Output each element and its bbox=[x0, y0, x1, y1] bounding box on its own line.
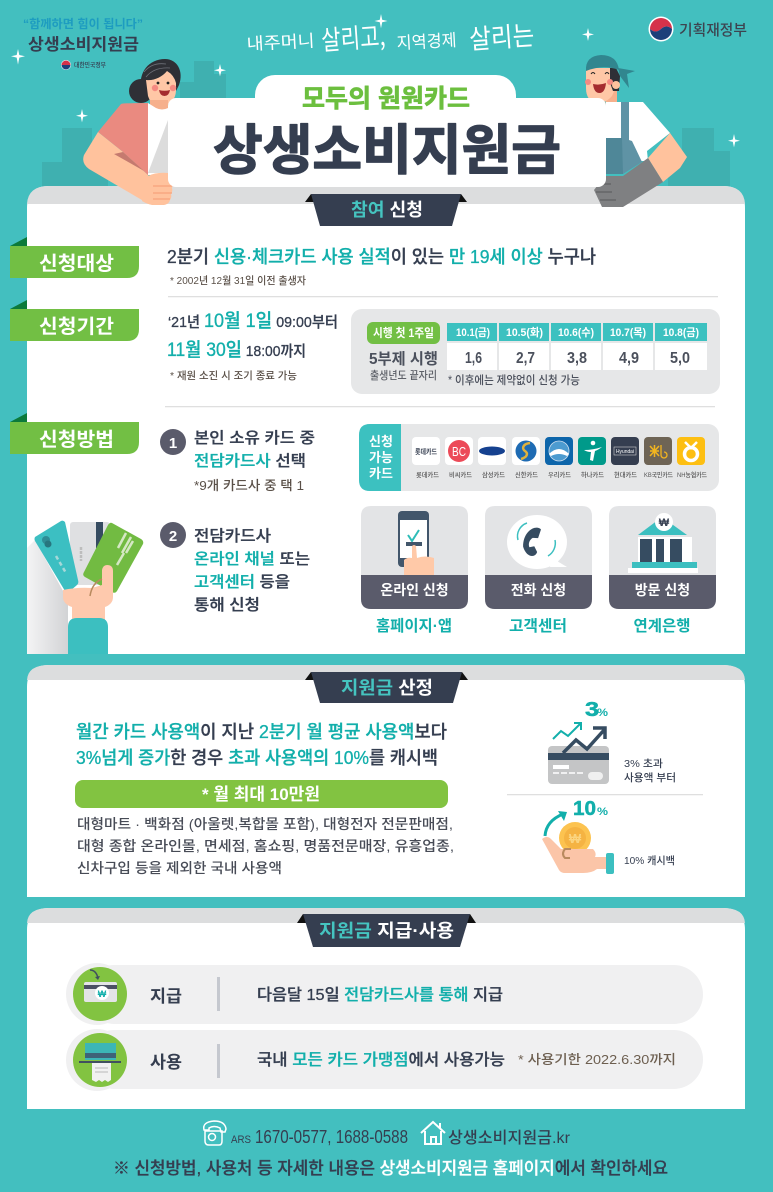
card: bank visit bbox=[609, 506, 716, 635]
step 2 bbox=[160, 522, 310, 614]
available card logos: 롯데카드 bbox=[415, 447, 437, 456]
title sign bbox=[168, 75, 606, 187]
available card logos: 현대카드 bbox=[614, 470, 637, 479]
section ribbon: payment and use bbox=[297, 914, 476, 947]
icon: card terminal receipt bbox=[79, 1043, 121, 1082]
icon: card with rising arrows bbox=[548, 699, 609, 784]
icon: card with rising arrows: % bbox=[597, 707, 608, 719]
card: phone application: 고객센터 bbox=[509, 617, 567, 635]
campaign logo top-left bbox=[23, 16, 143, 70]
label: method bbox=[10, 413, 139, 454]
available card logos: 롯데카드 bbox=[416, 470, 439, 479]
row: use: * 사용기한 2022.6.30까지 bbox=[518, 1052, 676, 1067]
footer contact: 1670-0577, 1688-0588 bbox=[255, 1127, 408, 1147]
campaign logo top-left: “함께하면 힘이 됩니다” bbox=[23, 16, 143, 31]
footer contact bbox=[204, 1121, 571, 1147]
sparkles bbox=[11, 14, 740, 147]
footer note: ※ 신청방법, 사용처 등 자세한 내용은 상생소비지원금 홈페이지에서 확인하세요 bbox=[113, 1159, 668, 1178]
icon: card with rising arrows: 3 bbox=[585, 699, 599, 721]
panel: participation background bbox=[27, 186, 745, 654]
illustration: hand holding cards bbox=[27, 521, 143, 654]
schedule table: 2,7 bbox=[516, 350, 535, 367]
row: use: 국내 모든 카드 가맹점 에서 사용가능 bbox=[257, 1051, 505, 1069]
available card logos: 하나카드 bbox=[581, 470, 604, 479]
text: exclusions: 대형마트 · 백화점 (아울렛,복합몰 포함), 대형전자 전문판매점, bbox=[77, 816, 453, 832]
schedule table: 10.8(금) bbox=[663, 326, 699, 339]
step 2: 통해 신청 bbox=[194, 596, 260, 614]
row: use: 사용 bbox=[150, 1053, 182, 1072]
text: over 3% bbox=[624, 758, 676, 784]
text: exclusions: 신차구입 등을 제외한 국내 사용액 bbox=[77, 860, 282, 876]
text: period description: 11월 30일 18:00까지 bbox=[167, 339, 306, 361]
schedule table: 10.7(목) bbox=[610, 326, 646, 339]
icon: telephone bbox=[204, 1121, 226, 1145]
icon: coin in hand: % bbox=[597, 806, 608, 818]
ministry logo top-right: 기획재정부 bbox=[679, 22, 747, 39]
handwritten slogan: 지역경제 bbox=[396, 26, 457, 54]
schedule table: 10.6(수) bbox=[558, 326, 594, 339]
section ribbon: payment and use: 지원금 지급·사용 bbox=[319, 921, 454, 941]
card: online application: 홈페이지·앱 bbox=[376, 617, 452, 635]
label: target bbox=[10, 237, 139, 278]
label: target: 신청대상 bbox=[39, 253, 114, 275]
available card logos: NH농협카드 bbox=[677, 470, 707, 479]
section ribbon: participation: 참여 신청 bbox=[351, 200, 423, 220]
icon: coin in hand: 10 bbox=[573, 798, 596, 820]
available card logos: 신청 bbox=[369, 434, 393, 449]
card: bank visit: 연계은행 bbox=[634, 617, 690, 635]
row: payment bbox=[66, 963, 703, 1025]
schedule table: 10.1(금) bbox=[456, 326, 490, 339]
text: calculation rule bbox=[76, 722, 447, 768]
text: target description: 2분기 신용·체크카드 사용 실적이 있는 만 19세 이상 누구나 bbox=[167, 247, 596, 267]
handwritten slogan: 살리는 bbox=[468, 14, 535, 57]
available card logos bbox=[359, 424, 719, 491]
section ribbon: calculation: 지원금 산정 bbox=[341, 678, 433, 698]
text: calculation rule: 월간 카드 사용액이 지난 2분기 월 평균 사용액보다 bbox=[76, 722, 447, 742]
icon: coin in hand: ₩ bbox=[569, 831, 582, 846]
available card logos: 비씨카드 bbox=[449, 470, 472, 479]
text: period description: ‘21년 10월 1일 09:00부터 bbox=[168, 310, 338, 332]
footer contact: ARS bbox=[231, 1134, 251, 1146]
schedule table: 시행 첫 1주일 bbox=[373, 325, 434, 340]
text: 10% cashback: 10% 캐시백 bbox=[624, 854, 675, 867]
handwritten slogan: 내주머니 bbox=[246, 26, 315, 55]
step 2: 고객센터 등을 bbox=[194, 573, 290, 591]
icon: house bbox=[421, 1122, 445, 1144]
card: online application bbox=[361, 506, 468, 635]
card: bank visit: ₩ bbox=[659, 517, 670, 529]
subtitle: 모두의 원원카드 bbox=[302, 85, 470, 113]
card: online application: 온라인 신청 bbox=[380, 582, 449, 598]
available card logos: 카드 bbox=[369, 466, 393, 481]
main title: 상생소비지원금 bbox=[213, 121, 561, 181]
handwritten slogan bbox=[246, 14, 535, 58]
step 1: 1 bbox=[169, 435, 177, 452]
text: over 3%: 3% 초과 bbox=[624, 758, 663, 770]
icon: coin in hand bbox=[542, 798, 614, 874]
available card logos: BC bbox=[452, 444, 466, 459]
text: target description: * 2002년 12월 31일 이전 출생자 bbox=[170, 274, 306, 287]
row: payment: 지급 bbox=[150, 987, 182, 1006]
schedule table: 5부제 시행 bbox=[369, 350, 438, 368]
text: target description bbox=[167, 247, 596, 287]
step 2: 전담카드사 bbox=[194, 527, 271, 545]
step 1: 전담카드사 선택 bbox=[194, 452, 306, 470]
section ribbon: participation bbox=[305, 194, 467, 226]
label: period bbox=[10, 300, 139, 341]
schedule table: 3,8 bbox=[567, 350, 587, 367]
available card logos: KB국민카드 bbox=[644, 470, 673, 479]
step 2: 온라인 채널 또는 bbox=[194, 550, 310, 568]
step 1: 본인 소유 카드 중 bbox=[194, 429, 315, 447]
schedule table: 출생년도 끝자리 bbox=[370, 369, 437, 382]
schedule table: * 이후에는 제약없이 신청 가능 bbox=[448, 374, 580, 387]
text: exclusions: 대형 종합 온라인몰, 면세점, 홈쇼핑, 명품전문매장, 유흥업종, bbox=[77, 838, 454, 854]
card: phone application: 전화 신청 bbox=[511, 582, 566, 598]
text: period description bbox=[167, 310, 338, 382]
text: exclusions bbox=[77, 816, 454, 876]
text: calculation rule: 3%넘게 증가한 경우 초과 사용액의 10%를 캐시백 bbox=[76, 748, 438, 768]
text: over 3%: 사용액 부터 bbox=[624, 772, 676, 784]
background city skyline bbox=[42, 61, 730, 186]
handwritten slogan: 살리고, bbox=[320, 15, 386, 58]
section ribbon: calculation bbox=[305, 672, 468, 703]
campaign logo top-left: 상생소비지원금 bbox=[28, 35, 139, 54]
footer contact: 상생소비지원금.kr bbox=[448, 1129, 571, 1147]
schedule table: 4,9 bbox=[619, 350, 639, 367]
callout: monthly maximum: * 월 최대 10만원 bbox=[202, 785, 320, 804]
available card logos: 우리카드 bbox=[548, 470, 571, 479]
schedule table bbox=[351, 309, 720, 394]
card: bank visit: 방문 신청 bbox=[635, 582, 690, 598]
icon: card with won bbox=[84, 970, 117, 1002]
card: phone application bbox=[485, 506, 592, 635]
step 2: 2 bbox=[169, 528, 177, 545]
illustration: man holding sign bbox=[585, 55, 687, 207]
schedule table: 10.5(화) bbox=[506, 325, 543, 339]
illustration: woman holding sign bbox=[83, 59, 181, 205]
campaign logo top-left: 대한민국정부 bbox=[74, 60, 106, 69]
row: payment: 다음달 15일 전담카드사를 통해 지급 bbox=[257, 986, 503, 1004]
step 1 bbox=[160, 429, 315, 493]
ministry logo top-right bbox=[648, 16, 747, 42]
label: period: 신청기간 bbox=[39, 316, 114, 338]
text: period description: * 재원 소진 시 조기 종료 가능 bbox=[170, 369, 297, 382]
available card logos: 가능 bbox=[369, 450, 393, 465]
panel: payment and use bbox=[27, 908, 745, 1109]
callout: monthly maximum bbox=[75, 780, 448, 808]
schedule table: 1,6 bbox=[465, 350, 482, 367]
panel: support calculation bbox=[27, 665, 745, 897]
icon: card with won: ₩ bbox=[98, 989, 107, 999]
label: method: 신청방법 bbox=[39, 429, 114, 451]
schedule table: 5,0 bbox=[670, 350, 690, 367]
available card logos: Hyundai bbox=[616, 449, 634, 455]
step 1: *9개 카드사 중 택 1 bbox=[194, 478, 304, 493]
available card logos: 신한카드 bbox=[515, 470, 538, 479]
available card logos: 삼성카드 bbox=[482, 470, 505, 479]
row: use bbox=[66, 1029, 703, 1091]
